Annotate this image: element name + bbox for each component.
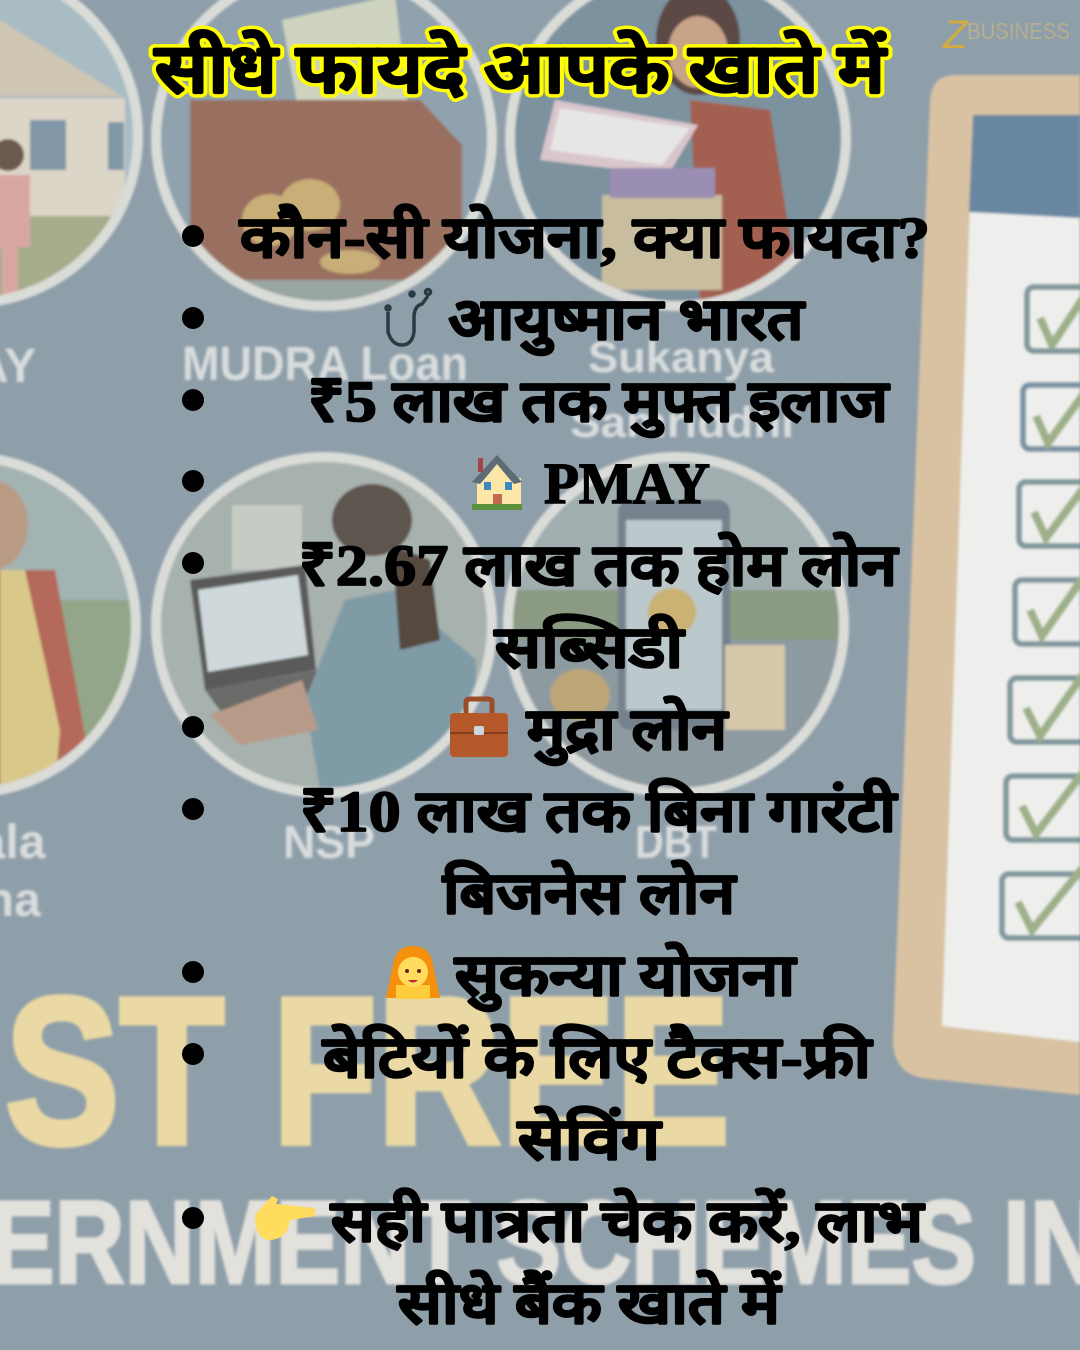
Ayushman Bharat: आयुष्मान भारत — [448, 287, 806, 356]
checklist row 4 — [1015, 575, 1080, 644]
circle ring: woman at laptop — [156, 457, 492, 793]
bullet list — [182, 204, 930, 1336]
circle ring: phone — [508, 457, 844, 793]
PMAY benefit line 1: ₹2.67 लाख तक होम लोन — [299, 532, 899, 598]
Mudra loan: मुद्रा लोन — [526, 696, 729, 766]
checklist row 3 — [1019, 482, 1080, 546]
checklist row 2 — [1023, 385, 1080, 449]
circle ring: wallet — [156, 0, 492, 306]
icon: pointing hand — [255, 1196, 315, 1240]
background label: NSP: NSP — [283, 816, 375, 868]
checklist row 7 — [1002, 865, 1080, 938]
Mudra benefit line 2: बिजनेस लोन — [442, 860, 737, 926]
circle: girl with books — [516, 0, 840, 300]
icon: girl — [386, 946, 440, 999]
title: सीधे फायदे आपके खाते में — [153, 30, 888, 107]
logo: Z Business — [942, 13, 1070, 57]
circle: woman at laptop — [160, 461, 488, 788]
icon: briefcase — [450, 699, 508, 757]
circle ring: house — [0, 0, 138, 303]
checklist row 6 — [1006, 770, 1080, 840]
question line: कौन-सी योजना, क्या फायदा? — [239, 204, 930, 270]
bullets — [182, 225, 204, 1229]
icon: house — [472, 455, 522, 510]
logo: Z Business: BUSINESS — [967, 18, 1070, 44]
background label: Sukanya: Sukanya — [588, 333, 775, 382]
icon: stethoscope — [386, 290, 430, 345]
background heading: COST FREE: ST FREE — [5, 955, 730, 1188]
title: सीधे फायदे आपके खाते में — [153, 30, 888, 107]
circle ring: girl with books — [510, 0, 846, 306]
closing line 1: सही पात्रता चेक करें, लाभ — [330, 1188, 925, 1254]
checklist row 5 — [1010, 672, 1080, 742]
clipboard — [893, 75, 1080, 1095]
PMAY: PMAY — [544, 451, 710, 516]
Ayushman benefit: ₹5 लाख तक मुफ्त इलाज — [308, 369, 890, 438]
Sukanya benefit line 1: बेटियों के लिए टैक्स-फ्री — [322, 1024, 873, 1090]
circle: house — [0, 0, 134, 296]
background label: MUDRA Loan: MUDRA Loan — [182, 338, 468, 391]
Sukanya Yojana: सुकन्या योजना — [454, 942, 797, 1012]
PMAY benefit line 2: सब्सिडी — [494, 614, 685, 680]
circle: woman in sari — [0, 464, 132, 786]
logo: Z Business: Z — [942, 13, 969, 57]
background label: Samriddhi: Samriddhi — [570, 398, 794, 447]
circle: phone — [512, 462, 840, 786]
circle: wallet — [189, 0, 463, 301]
checklist row 1 — [1027, 287, 1080, 351]
circle ring: woman in sari — [0, 457, 136, 793]
background label: DBT: DBT — [635, 816, 717, 868]
closing line 2: सीधे बैंक खाते में — [397, 1270, 783, 1336]
Sukanya benefit line 2: सेविंग — [517, 1106, 663, 1172]
Mudra benefit line 1: ₹10 लाख तक बिना गारंटी — [300, 778, 898, 844]
